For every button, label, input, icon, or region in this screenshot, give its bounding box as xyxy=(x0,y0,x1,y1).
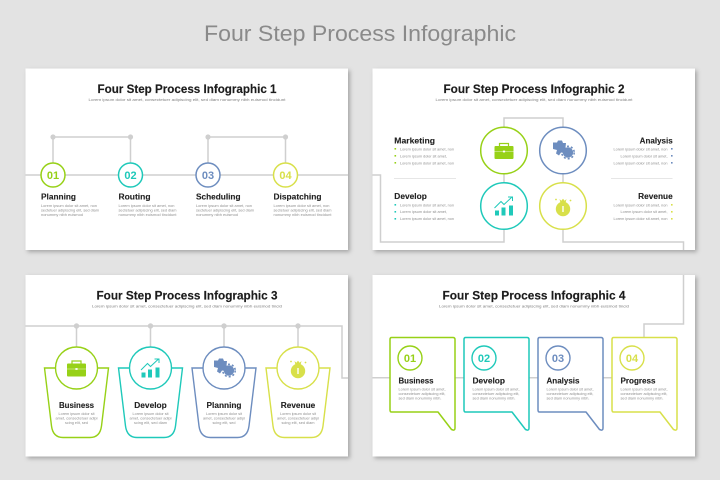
card: business: Lorem ipsum dolor sit xyxy=(58,412,94,416)
icon: gears xyxy=(553,140,574,159)
text: analysis: Analysis xyxy=(640,136,673,146)
card: business: amet, consectetuer adipi xyxy=(56,416,98,420)
subtitle: infographic 4: Lorem ipsum dolor sit amet, consectetuer adipiscing elit, sed diam nonummy nibh euismod tincid xyxy=(439,304,629,308)
text: develop: Lorem ipsum dolor sit amet, non xyxy=(400,217,454,221)
main title: Four Step Process Infographic xyxy=(204,21,516,46)
card: progress: Progress xyxy=(620,376,656,386)
step 01 planning: Lorem ipsum dolor sit amet, non xyxy=(41,204,97,208)
card: develop: scing elit, sed diam xyxy=(134,421,167,425)
card: analysis: sed diam nonummy nibh. xyxy=(546,396,590,400)
text: analysis: Lorem ipsum dolor sit amet, non xyxy=(614,147,668,151)
card: develop xyxy=(464,338,529,430)
card: analysis: Analysis xyxy=(546,376,580,386)
step 02 routing: Routing xyxy=(118,192,151,202)
text: marketing: Lorem ipsum dolor sit amet, non xyxy=(400,147,454,151)
card: business: Business xyxy=(59,401,95,410)
step 03 scheduling: 03 xyxy=(202,170,214,182)
text: revenue: Lorem ipsum dolor sit amet, non xyxy=(614,217,668,221)
step 04 dispatching xyxy=(274,163,332,217)
card: revenue: Revenue xyxy=(281,401,316,410)
card: develop: sed diam nonummy nibh. xyxy=(472,396,516,400)
step 02 routing: nonummy nibh euismod tincidunt xyxy=(118,213,176,217)
card: revenue xyxy=(266,347,330,438)
step 03 scheduling: Scheduling xyxy=(196,192,241,202)
step 03 scheduling: Lorem ipsum dolor sit amet, non xyxy=(196,204,252,208)
step 04 dispatching: nonummy nibh euismod tincidunt xyxy=(274,213,332,217)
card: develop: Develop xyxy=(472,376,505,386)
card: develop: amet, consectetuer adipi xyxy=(130,416,172,420)
icon: money bag xyxy=(555,199,571,216)
card: develop: Lorem ipsum dolor sit xyxy=(132,412,168,416)
card: planning: Planning xyxy=(206,401,242,410)
panel: infographic 3 xyxy=(26,275,348,456)
text: revenue xyxy=(614,192,673,221)
circle: chart xyxy=(481,183,527,229)
connector lines xyxy=(26,134,348,175)
card: business xyxy=(390,338,455,430)
step 04 dispatching: Dispatching xyxy=(274,192,322,202)
step 03 scheduling: sectetuer adipiscing elit, sed diam xyxy=(196,208,254,212)
step 01 planning xyxy=(41,163,99,217)
circle: gears xyxy=(540,127,586,174)
text: marketing: Marketing xyxy=(394,136,435,146)
card: develop: Lorem ipsum dolor sit amet, xyxy=(472,388,520,392)
icon: briefcase xyxy=(494,144,514,159)
step 04 dispatching: Lorem ipsum dolor sit amet, non xyxy=(274,204,330,208)
subtitle: infographic 3: Lorem ipsum dolor sit amet, consectetuer adipiscing elit, sed diam nonummy nibh euismod tincid xyxy=(92,304,282,308)
step 01 planning: sectetuer adipiscing elit, sed diam xyxy=(41,208,99,212)
card: analysis xyxy=(538,338,603,430)
step 02 routing: sectetuer adipiscing elit, sed diam xyxy=(118,208,176,212)
icon: money bag xyxy=(290,361,306,378)
card: analysis: Lorem ipsum dolor sit amet, xyxy=(546,388,594,392)
card: progress: 04 xyxy=(626,353,639,365)
step 04 dispatching: 04 xyxy=(279,170,292,182)
icon: briefcase xyxy=(67,361,86,376)
text: revenue: Revenue xyxy=(638,192,673,201)
step 02 routing: Lorem ipsum dolor sit amet, non xyxy=(118,204,174,208)
step 03 scheduling: nonummy nibh euismod xyxy=(196,213,238,217)
heading: infographic 4: Four Step Process Infographic 4 xyxy=(442,291,626,303)
step 01 planning: Planning xyxy=(41,192,76,202)
subtitle: infographic 1: Lorem ipsum dolor sit amet, consectetuer adipiscing elit, sed diam nonummy nibh euismod tincidunt xyxy=(88,97,286,102)
text: analysis: Lorem ipsum dolor sit amet, xyxy=(620,154,668,158)
card: analysis: consectetuer adipiscing elit, xyxy=(546,392,594,396)
connector lines xyxy=(372,118,684,250)
card: progress: Lorem ipsum dolor sit amet, xyxy=(620,388,668,392)
card: business: 01 xyxy=(404,353,416,365)
icon: growth chart xyxy=(494,197,513,216)
card: planning: scing elit, sed xyxy=(212,421,236,425)
heading: infographic 2: Four Step Process Infographic 2 xyxy=(444,84,624,96)
card: revenue: Lorem ipsum dolor sit xyxy=(280,412,316,416)
text: marketing: Lorem ipsum dolor sit amet, xyxy=(400,154,447,158)
step 01 planning: nonummy nibh euismod xyxy=(41,213,83,217)
text: analysis xyxy=(614,136,673,165)
text: analysis: Lorem ipsum dolor sit amet, non xyxy=(614,161,668,165)
text: revenue: Lorem ipsum dolor sit amet, non xyxy=(614,203,668,207)
icon: gears xyxy=(214,358,235,377)
circle: money bag xyxy=(540,183,586,229)
text: develop: Lorem ipsum dolor sit amet, non xyxy=(400,203,454,207)
step 02 routing xyxy=(118,163,176,217)
card: develop: 02 xyxy=(478,353,490,365)
card: develop: consectetuer adipiscing elit, xyxy=(472,392,520,396)
heading: infographic 3: Four Step Process Infographic 3 xyxy=(96,291,278,303)
card: develop xyxy=(118,347,182,438)
card: progress: consectetuer adipiscing elit, xyxy=(620,392,668,396)
connector lines xyxy=(372,275,684,378)
panel: infographic 2 xyxy=(372,68,695,250)
card: planning xyxy=(192,347,256,438)
connector lines xyxy=(26,323,348,378)
card: revenue: amet, consectetuer adipi xyxy=(277,416,319,420)
card: business: Lorem ipsum dolor sit amet, xyxy=(398,388,446,392)
step 04 dispatching: sectetuer adipiscing elit, sed diam xyxy=(274,208,332,212)
card: planning: amet, consectetuer adipi xyxy=(203,416,245,420)
step 02 routing: 02 xyxy=(124,170,137,182)
text: marketing: Lorem ipsum dolor sit amet, non xyxy=(400,161,454,165)
card: analysis: 03 xyxy=(552,353,564,365)
card: planning: Lorem ipsum dolor sit xyxy=(206,412,242,416)
card: revenue: scing elit, sed diam xyxy=(282,421,314,425)
card: progress xyxy=(612,338,677,430)
panel: infographic 1 xyxy=(26,68,348,250)
card: business: Business xyxy=(398,376,434,386)
card: business xyxy=(44,347,108,438)
card: business: scing elit, sed xyxy=(65,421,88,425)
text: marketing xyxy=(394,136,454,165)
subtitle: infographic 2: Lorem ipsum dolor sit amet, consectetuer adipiscing elit, sed diam nonummy nibh euismod tincidunt xyxy=(436,97,633,102)
step 01 planning: 01 xyxy=(47,170,59,182)
text: develop: Develop xyxy=(394,192,427,201)
card: progress: sed diam nonummy nibh. xyxy=(620,396,664,400)
text: revenue: Lorem ipsum dolor sit amet, xyxy=(620,210,668,214)
card: business: consectetuer adipiscing elit, xyxy=(398,392,446,396)
step 03 scheduling xyxy=(196,163,254,217)
card: business: sed diam nonummy nibh. xyxy=(398,396,442,400)
panel: infographic 4 xyxy=(372,275,695,456)
icon: growth chart xyxy=(141,359,160,378)
text: develop xyxy=(394,192,454,221)
text: develop: Lorem ipsum dolor sit amet, xyxy=(400,210,447,214)
heading: infographic 1: Four Step Process Infographic 1 xyxy=(98,84,277,96)
card: develop: Develop xyxy=(134,401,167,410)
circle: briefcase xyxy=(481,127,527,174)
